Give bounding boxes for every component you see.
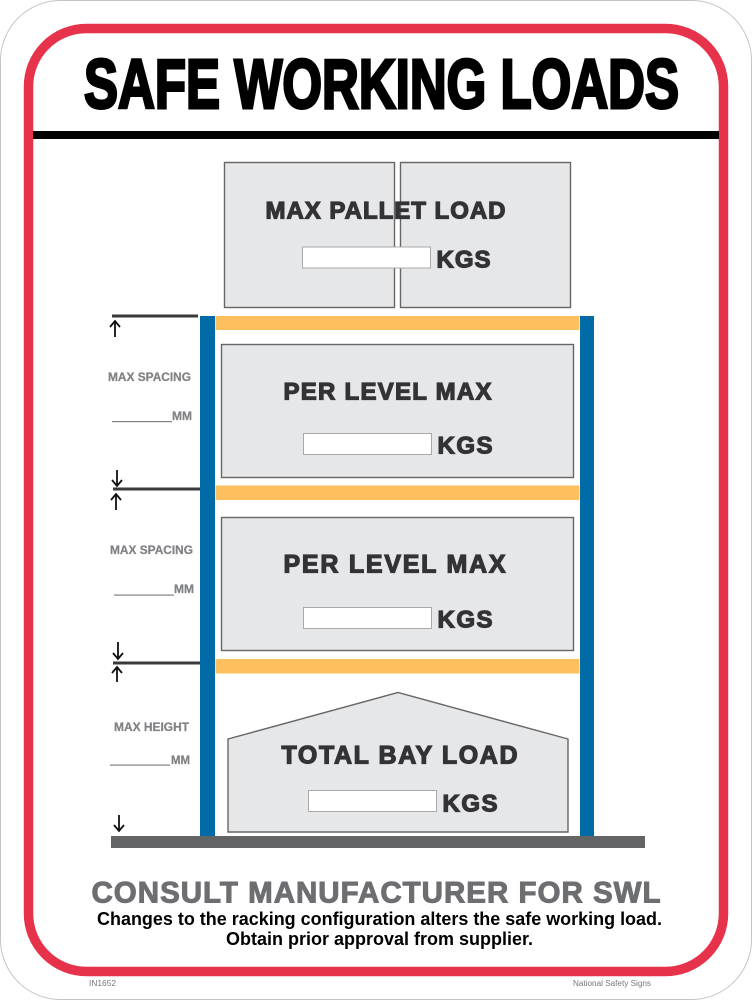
product code: IN1652: [89, 979, 117, 988]
footer heading: CONSULT MANUFACTURER FOR SWL: [92, 876, 660, 910]
racking frame: [200, 316, 594, 836]
label: upper spacing: MM: [172, 411, 192, 423]
label: max height: MAX HEIGHT: [114, 722, 189, 734]
panel: lower level: KGS: [438, 606, 492, 634]
label: lower spacing: MAX SPACING: [110, 545, 193, 557]
footer note: Changes to the racking configuration alters the safe working load.: [97, 908, 662, 929]
label: max height: [110, 722, 190, 767]
panel: max pallet load: [224, 162, 570, 308]
spacing marker lines: [112, 314, 200, 664]
panel: upper level: PER LEVEL MAX: [284, 378, 492, 406]
panel: upper level: [222, 344, 574, 478]
label: upper spacing: [108, 372, 192, 423]
arrows: dimension markers: [110, 321, 124, 831]
panel: total bay load: [228, 692, 568, 832]
panel: upper level: KGS: [438, 432, 492, 460]
maker credit: National Safety Signs: [573, 979, 651, 988]
floor: [111, 836, 645, 848]
panel: max pallet load: MAX PALLET LOAD: [266, 198, 506, 224]
panel: max pallet load: KGS: [436, 246, 490, 274]
label: max height: MM: [171, 755, 190, 767]
panel: total bay load: TOTAL BAY LOAD: [282, 742, 518, 770]
label: upper spacing: MAX SPACING: [108, 372, 191, 384]
label: lower spacing: MM: [174, 584, 194, 596]
title rule: [33, 131, 719, 139]
panel: total bay load: KGS: [442, 790, 498, 818]
panel: lower level: [222, 518, 574, 650]
footer note: Obtain prior approval from supplier.: [226, 928, 533, 949]
label: lower spacing: [110, 545, 194, 596]
footer note: [97, 908, 662, 949]
panel: lower level: PER LEVEL MAX: [284, 550, 506, 578]
